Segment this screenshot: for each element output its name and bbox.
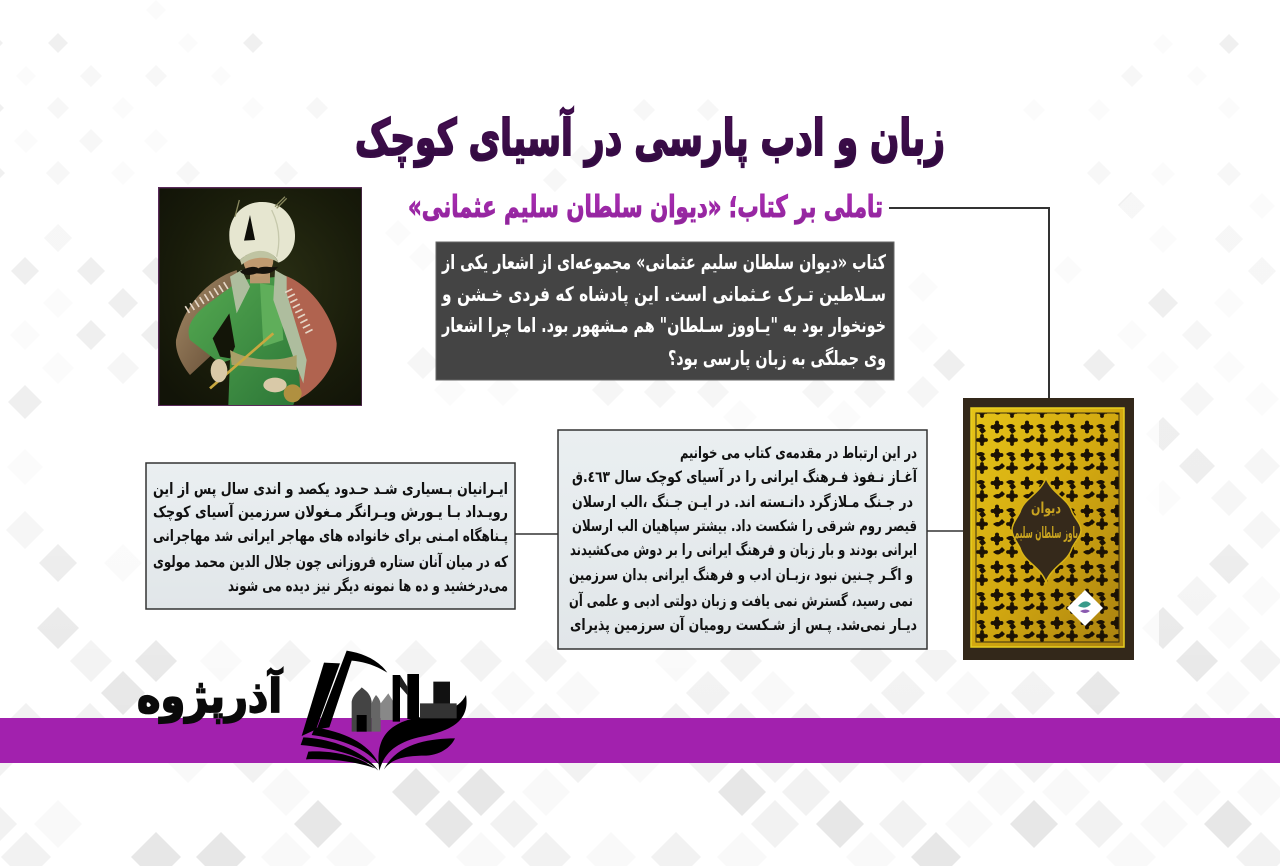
intro line 3: خونخوار بود به "یـاووز سـلطان" هم مـشهور بود. اما چرا اشعار	[441, 313, 886, 338]
left box line 3: پـناهگاه امـنی برای خانواده های مهاجر ایرانی شد مهاجرانی	[153, 526, 508, 546]
middle box line 5: ایرانی بودند و بار زبان و فرهنگ ایرانی را بر دوش می‌کشیدند	[570, 541, 917, 559]
logo wordmark: آذرپژوه	[137, 668, 283, 724]
book cover: یاوز سلطان سلیم	[1014, 523, 1078, 542]
left text box	[146, 463, 515, 609]
middle box line 6: و اگـر چـنین نبود ،زبـان ادب و فرهنگ ایرانی بدان سرزمین	[569, 565, 913, 585]
book medallion	[1012, 478, 1081, 582]
intro line 4: وی جملگی به زبان پارسی بود؟	[668, 346, 886, 371]
logo	[137, 651, 467, 771]
left box line 2: رویـداد بـا یـورش ویـرانگر مـغولان سرزمین آسیای کوچک	[153, 502, 508, 522]
middle box line 3: در جـنگ مـلازگرد دانـسته اند. در ایـن جـنگ ،الب ارسلان	[572, 492, 913, 511]
dark intro text box	[436, 242, 894, 380]
title: زبان و ادب پارسی در آسیای کوچک	[355, 107, 945, 168]
publisher emblem diamond	[1067, 590, 1103, 626]
middle text box	[558, 430, 927, 649]
middle box line 2: آغـاز نـفوذ فـرهنگ ایرانی را در آسیای کوچک سال ٤٦٣.ق	[572, 467, 918, 487]
intro line 2: سـلاطین تـرک عـثمانی است. این پادشاه که فردی خـشن و	[441, 282, 886, 307]
left box line 4: که در میان آنان ستاره فروزانی چون جلال الدین محمد مولوی	[153, 552, 509, 572]
logo emblem: open book and skyline	[301, 651, 467, 771]
book title word: دیوان	[1031, 499, 1061, 517]
subtitle: تاملی بر کتاب؛ «دیوان سلطان سلیم عثمانی»	[408, 190, 883, 225]
middle box line 7: نمی رسید، گسترش نمی یافت و زبان دولتی ادبی و علمی آن	[569, 591, 913, 610]
middle box line 1: در این ارتباط در مقدمه‌ی کتاب می خوانیم	[680, 444, 917, 462]
connector: book to middle box	[927, 530, 963, 532]
portrait of Sultan Selim	[158, 187, 362, 406]
middle box line 4: قیصر روم شرقی را شکست داد. بیشتر سپاهیان الب ارسلان	[572, 517, 917, 536]
connector: middle box to left box	[515, 533, 558, 535]
middle box line 8: دیـار نمی‌شد. پـس از شـکست رومیان آن سرزمین پذیرای	[570, 615, 917, 635]
book cover	[963, 398, 1134, 660]
arrow: connector from subtitle to book	[889, 208, 1049, 398]
left box line 1: ایـرانیان بـسیاری شـد حـدود یکصد و اندی سال پس از این	[153, 480, 508, 499]
intro line 1: کتاب «دیوان سلطان سلیم عثمانی» مجموعه‌ای از اشعار یکی از	[441, 250, 886, 274]
left box line 5: می‌درخشید و ده ها نمونه دیگر نیز دیده می شوند	[228, 576, 508, 595]
purple footer band	[0, 718, 1280, 763]
